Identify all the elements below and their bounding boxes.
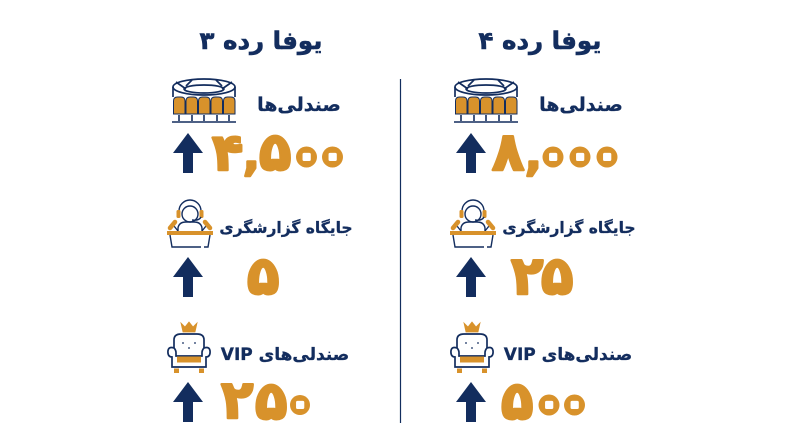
value: 8,000 seats: ۰ [598, 138, 616, 173]
arrow: VIP minimum [456, 382, 486, 422]
icon: stadium seats [172, 79, 236, 122]
label: VIP seats: صندلی‌های VIP [504, 345, 632, 365]
value: 250 VIP seats: ۵ [255, 371, 287, 432]
icon: VIP armchair [451, 322, 493, 373]
value: 25 press positions: ۲ [511, 246, 543, 307]
icon: VIP armchair [168, 322, 210, 373]
value: 250 VIP seats [221, 370, 310, 432]
value: 500 VIP seats: ۰ [566, 386, 584, 421]
value: 4,500 seats: , [243, 130, 260, 181]
value: 250 VIP seats: ۰ [291, 386, 309, 421]
label: press positions: جایگاه گزارشگری [502, 218, 636, 237]
heading: category 4: یوفا رده ۴ [479, 26, 601, 55]
value: 5 press positions: ۵ [247, 246, 279, 307]
value: 500 VIP seats: ۰ [540, 386, 558, 421]
value: 500 VIP seats: ۵ [501, 371, 533, 432]
icon: press reporter [450, 200, 496, 247]
value: 4,500 seats: ۰ [324, 138, 342, 173]
value: 4,500 seats [212, 122, 343, 183]
arrow: press minimum [173, 257, 203, 297]
heading: category 3: یوفا رده ۳ [200, 26, 322, 55]
arrow: VIP minimum [173, 382, 203, 422]
value: 25 press positions [511, 246, 573, 307]
icon: stadium seats [454, 79, 518, 122]
label: VIP seats: صندلی‌های VIP [221, 345, 349, 365]
divider [400, 79, 402, 423]
value: 4,500 seats: ۰ [298, 138, 316, 173]
arrow: press minimum [456, 257, 486, 297]
panel: UEFA category 4 [450, 26, 636, 432]
value: 8,000 seats: ۸ [492, 122, 524, 183]
value: 500 VIP seats [501, 371, 585, 432]
icon: press reporter [167, 200, 213, 247]
label: press positions: جایگاه گزارشگری [219, 218, 353, 237]
arrow: seats minimum [456, 133, 486, 173]
value: 4,500 seats: ۴ [212, 124, 243, 183]
value: 8,000 seats: ۰ [571, 138, 589, 173]
panel: UEFA category 3 [167, 26, 353, 432]
label: seats: صندلی‌ها [257, 94, 341, 116]
value: 250 VIP seats: ۲ [221, 370, 253, 431]
value: 8,000 seats [492, 122, 618, 183]
label: seats: صندلی‌ها [539, 94, 623, 116]
value: 8,000 seats: ۰ [544, 138, 562, 173]
value: 8,000 seats: , [525, 130, 542, 181]
value: 4,500 seats: ۵ [259, 122, 291, 183]
arrow: seats minimum [173, 133, 203, 173]
value: 25 press positions: ۵ [541, 246, 573, 307]
